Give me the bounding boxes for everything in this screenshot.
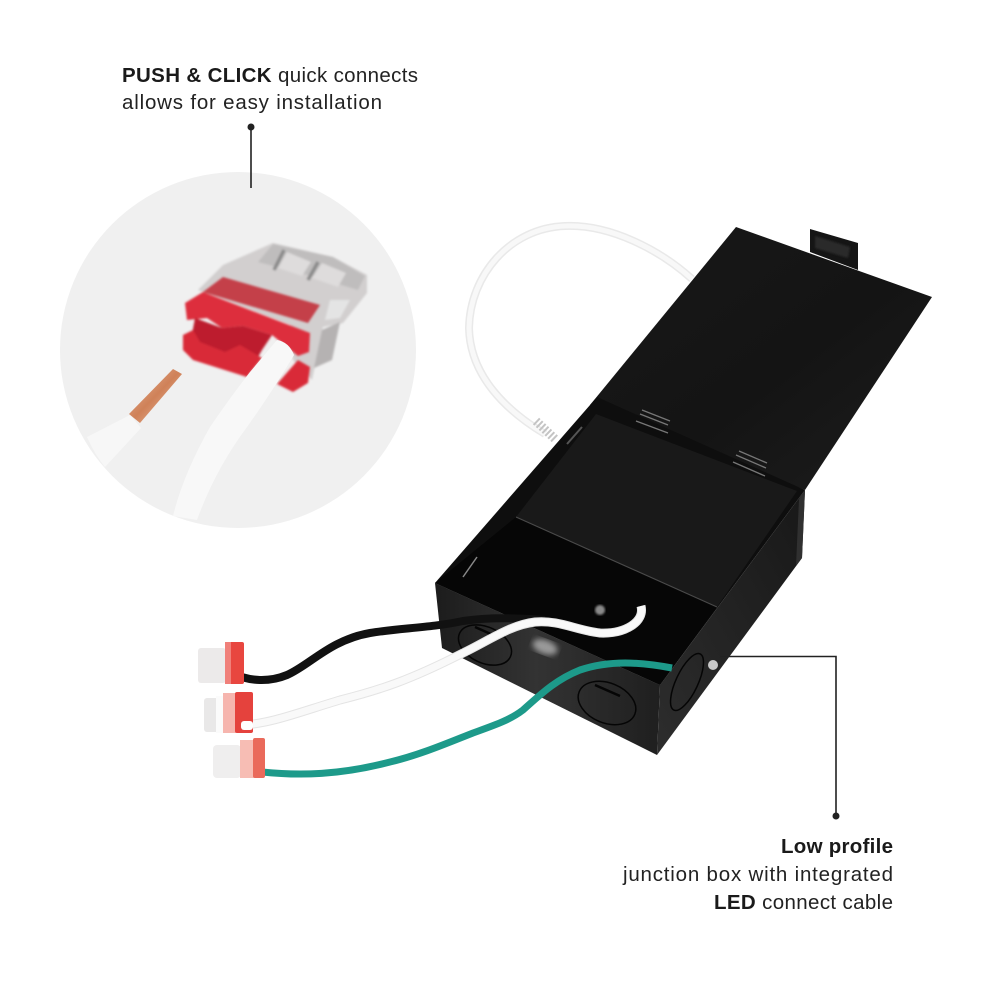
transparent connector body — [198, 243, 367, 380]
open lid — [590, 227, 932, 490]
left front wall — [435, 583, 660, 755]
detail circle: push and click connector — [60, 172, 416, 528]
callout text: low profile: Low profile — [781, 835, 893, 858]
callout text: push and click: allows for easy installation — [122, 91, 382, 114]
callout text: low profile: junction box with integrated — [622, 863, 893, 886]
lid clip — [810, 229, 858, 270]
callout text: low profile: LED connect cable — [714, 891, 893, 914]
thin white cable — [87, 415, 141, 467]
interior raised panel — [516, 414, 797, 607]
junction box — [435, 227, 932, 755]
callout text: push and click — [122, 64, 418, 114]
red connector face — [183, 277, 320, 392]
wire: green — [262, 663, 672, 774]
right side wall — [657, 490, 805, 755]
callout text: low profile — [622, 835, 893, 914]
white LED connect cable loop — [469, 226, 692, 440]
wire: black — [232, 618, 545, 680]
knockouts — [452, 617, 710, 733]
wall reflection — [530, 636, 560, 658]
leader line: push and click — [248, 124, 254, 188]
connector: green wire — [213, 738, 265, 778]
box interior — [435, 397, 805, 685]
hinges — [636, 410, 767, 476]
thick white cable — [173, 340, 294, 520]
side screw — [708, 660, 718, 670]
leader line: low profile — [720, 656, 840, 820]
interior front compartment — [435, 517, 717, 685]
right wall flange — [796, 490, 805, 566]
wire: white — [242, 606, 642, 725]
connector: black wire — [198, 642, 244, 684]
connector: white wire — [204, 692, 253, 733]
callout text: push and click: PUSH & CLICK quick connects — [122, 64, 418, 87]
grounding screw — [595, 605, 605, 615]
copper conductor — [129, 369, 182, 423]
